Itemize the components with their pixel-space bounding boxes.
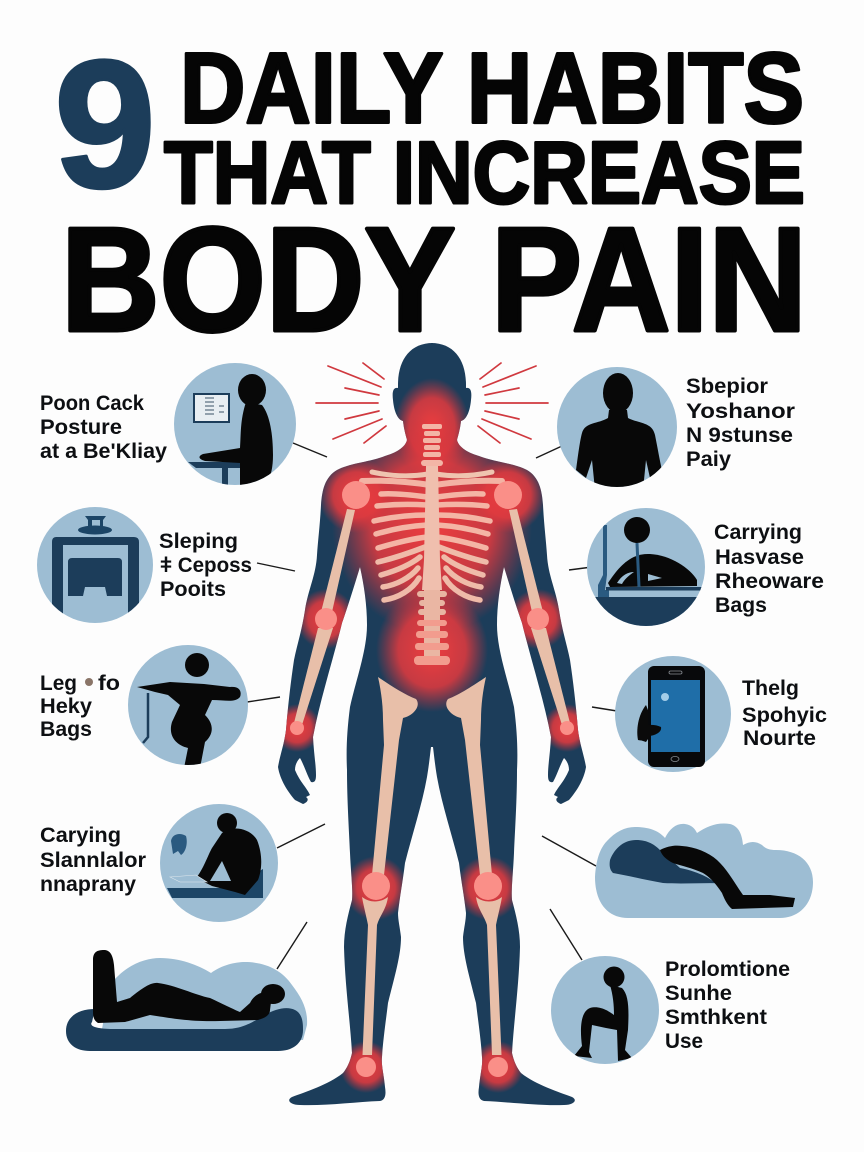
label: Pooits <box>160 577 226 601</box>
spine <box>414 424 450 665</box>
label: Heky <box>40 694 92 718</box>
label <box>40 823 147 896</box>
label: Sleping <box>159 529 238 553</box>
rib cage <box>362 472 502 600</box>
icon: person leaning over wedge <box>160 804 278 922</box>
label <box>40 391 167 463</box>
title line: daily habits: DAILY HABITS <box>180 32 804 144</box>
body figure with skeleton and pain points <box>273 343 591 1105</box>
label: Carrying <box>714 520 802 544</box>
label: Sbepior <box>686 374 769 398</box>
icon: phone in hand <box>615 656 731 772</box>
icon: person at desk <box>174 363 296 486</box>
limb bones and pelvis <box>294 509 570 1055</box>
icon: person bent over <box>587 508 706 629</box>
label: Carying <box>40 823 121 847</box>
panel: poor back posture <box>40 363 296 486</box>
label: Yoshanor <box>686 399 796 423</box>
label: Leg <box>40 671 77 695</box>
label: Prolomtione <box>665 957 790 981</box>
label: Thelg <box>742 676 799 700</box>
panel: leg position <box>40 645 248 768</box>
label <box>714 520 824 617</box>
icon: person leaning on stand <box>128 645 248 768</box>
icon: upper body silhouette <box>557 367 677 490</box>
label: at a Be'Kliay <box>40 439 167 463</box>
panel: carrying heavy bags <box>587 508 824 629</box>
label: Smthkent <box>665 1005 767 1029</box>
label <box>665 957 790 1053</box>
pain rays around the head <box>316 363 548 443</box>
body silhouette <box>278 343 586 1105</box>
label <box>40 671 120 741</box>
title <box>54 22 807 362</box>
label <box>686 374 796 471</box>
icon: person lying face down on cloud mat <box>595 823 813 918</box>
label: nnaprany <box>40 872 136 896</box>
label: Nourte <box>743 726 816 750</box>
title numeral 9: 9 <box>54 22 156 226</box>
panel: upper body posture <box>557 367 796 490</box>
icon: person lying with leg raised on mattress <box>66 950 307 1051</box>
label: Hasvase <box>715 545 804 569</box>
panel: carrying <box>40 804 278 922</box>
panel: prolonged sitting <box>551 956 790 1064</box>
label: N 9stunse <box>686 423 793 447</box>
label <box>159 529 252 601</box>
title line: body pain: BODY PAIN <box>61 198 807 362</box>
label: Slannlalor <box>40 848 147 872</box>
leader lines <box>247 443 617 969</box>
panel: smartphone use <box>615 656 827 772</box>
label: Poon Cack <box>40 391 144 415</box>
label: Bags <box>40 717 92 741</box>
label: ǂ Ceposs <box>160 553 252 577</box>
panel: sleeping in poor positions <box>37 507 252 625</box>
label: Posture <box>40 415 122 439</box>
icon: bed frame <box>37 507 153 625</box>
title line: that increase: THAT INCREASE <box>164 123 805 222</box>
label: Paiy <box>686 447 731 471</box>
label: Spohyic <box>742 703 827 727</box>
label: fo <box>98 671 120 695</box>
icon: seated squat silhouette <box>551 956 659 1064</box>
joint markers <box>290 481 574 1077</box>
label: Rheoware <box>715 569 824 593</box>
label: Sunhe <box>665 981 732 1005</box>
label: Use <box>665 1029 703 1053</box>
label <box>742 676 827 750</box>
red glow areas <box>273 378 591 1093</box>
label: Bags <box>715 593 767 617</box>
